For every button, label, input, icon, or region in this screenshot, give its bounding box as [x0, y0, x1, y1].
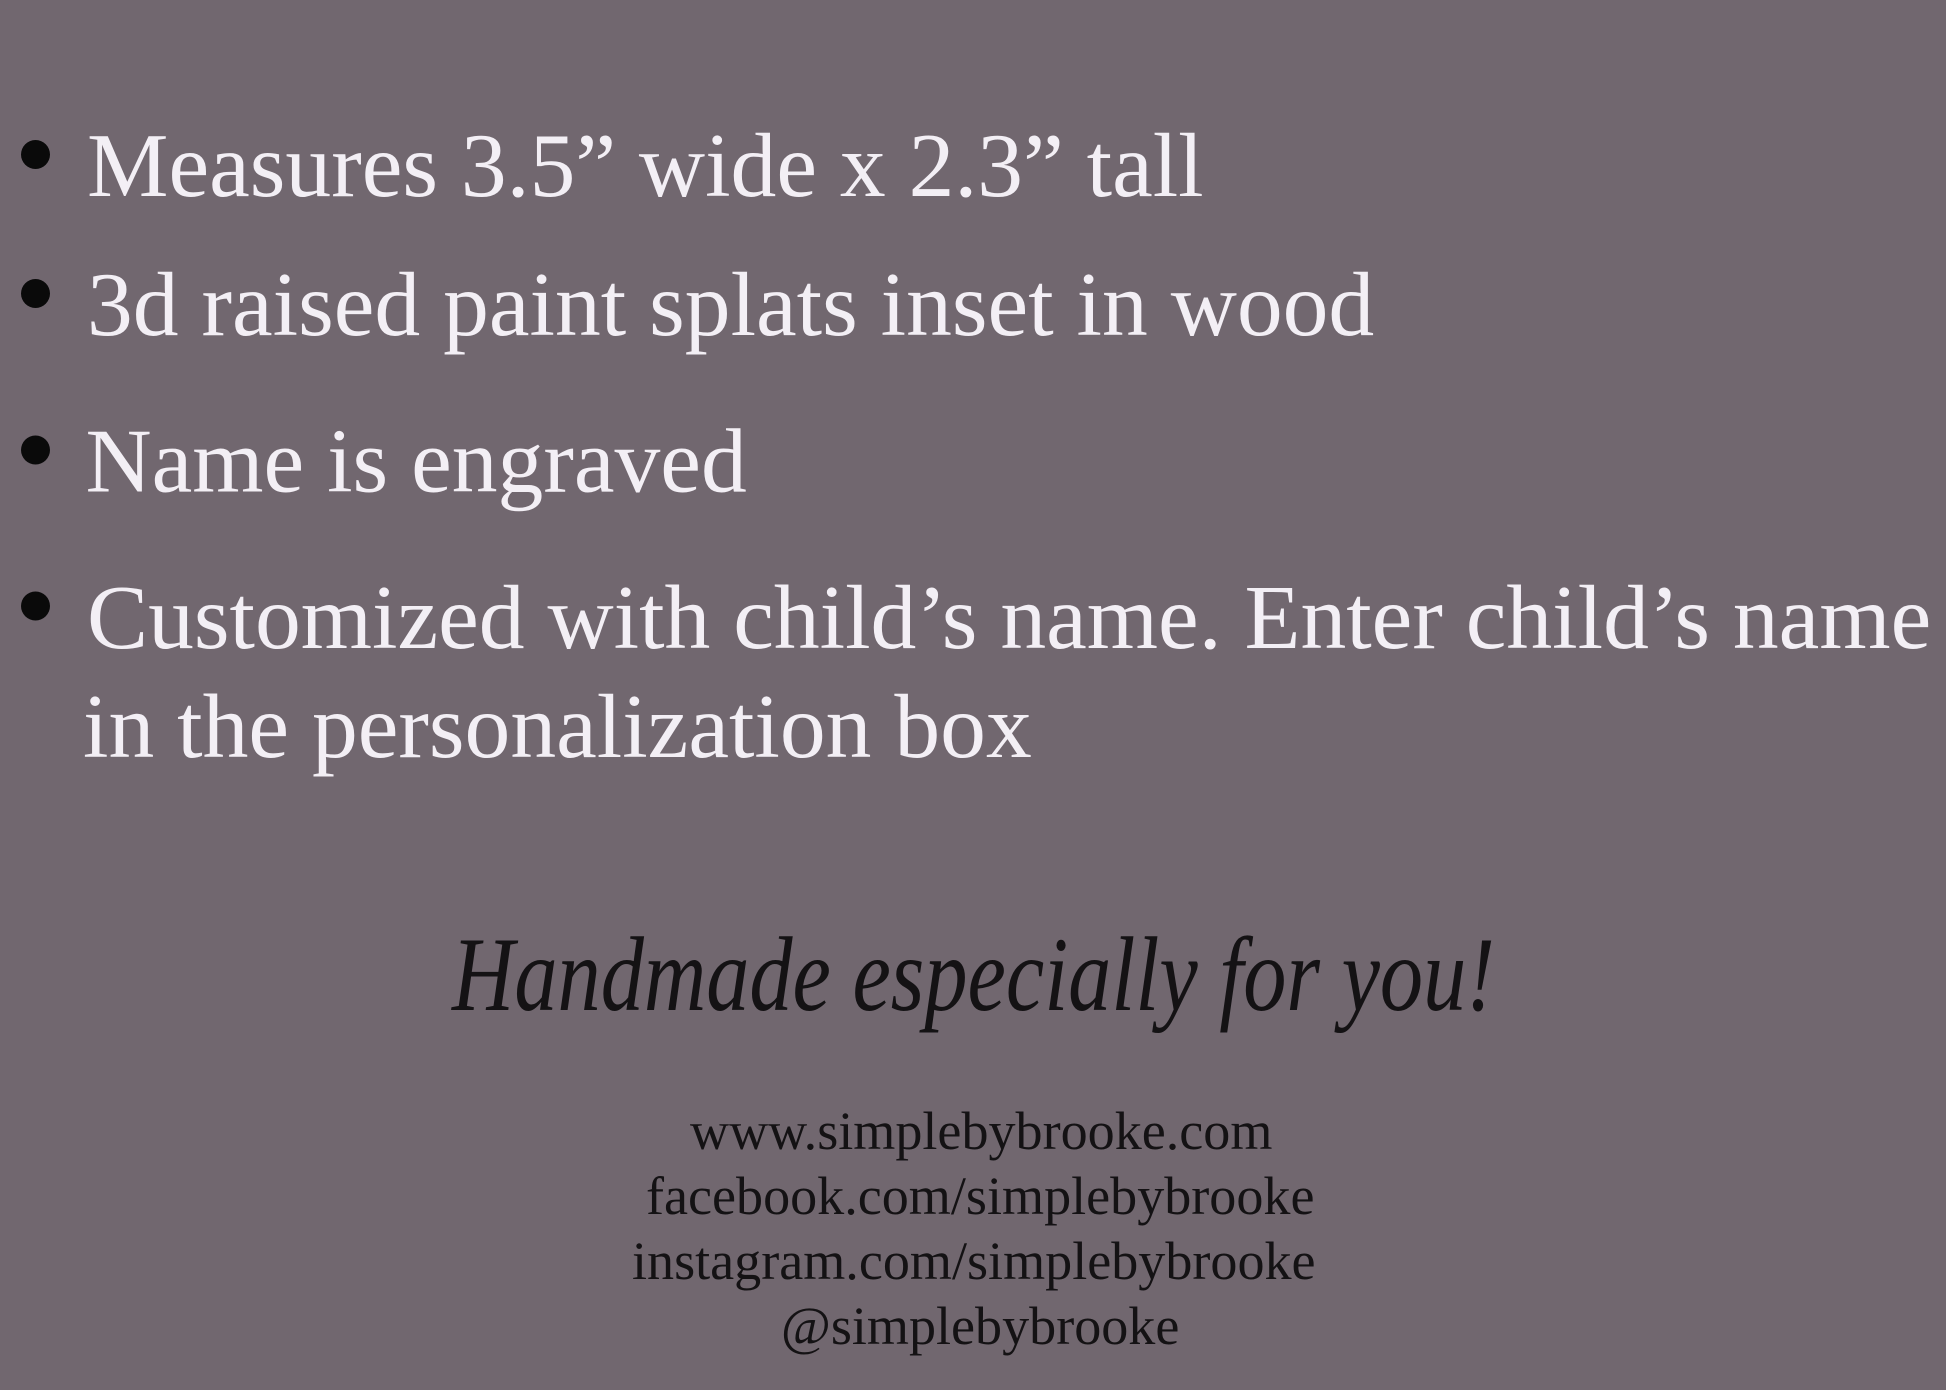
script tagline: Handmade especially for you! [450, 916, 1495, 1033]
bullet item: raised paint: 3d raised paint splats inset in wood [87, 253, 1374, 355]
facebook: facebook.com/simplebybrooke [646, 1166, 1314, 1226]
contact links [632, 1101, 1316, 1356]
bullet item: customization [21, 566, 1931, 777]
instagram: instagram.com/simplebybrooke [632, 1231, 1316, 1291]
bullet item: customization: in the personalization box [83, 675, 1032, 777]
bullet item: engraving: Name is engraved [86, 410, 747, 512]
feature list [21, 114, 1931, 777]
handle: @simplebybrooke [781, 1296, 1179, 1356]
website: www.simplebybrooke.com [690, 1101, 1272, 1161]
bullet item: customization: Customized with child’s name. Enter child’s name [87, 566, 1931, 668]
bullet item: dimensions: Measures 3.5” wide x 2.3” tall [87, 114, 1204, 216]
